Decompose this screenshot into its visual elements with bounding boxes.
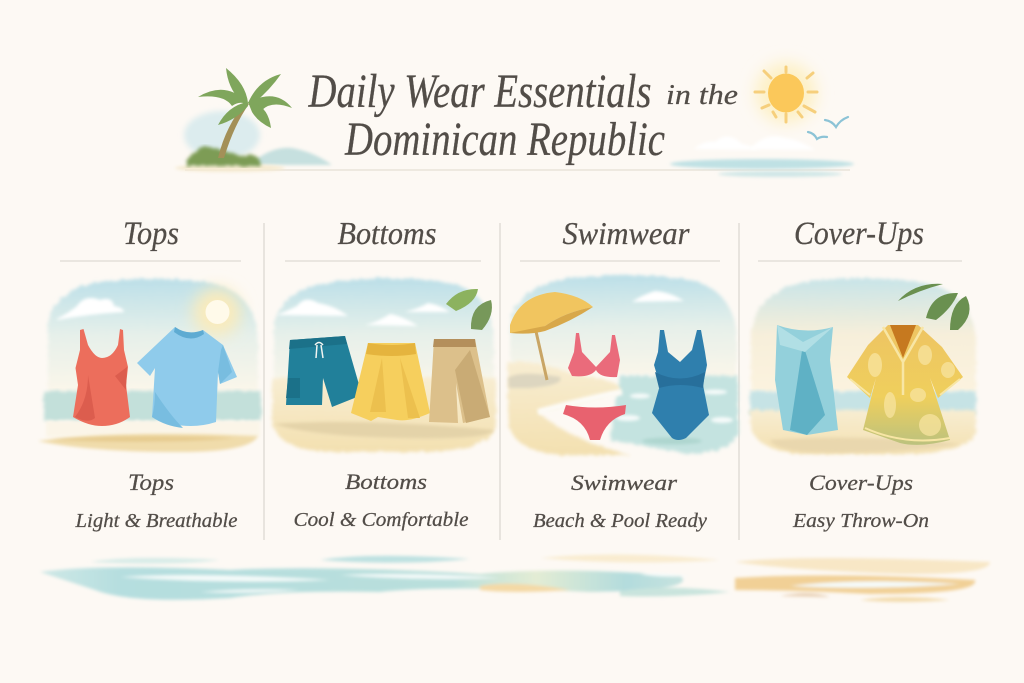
garment: yellow skirt <box>351 343 430 421</box>
panel: bottoms <box>272 215 496 531</box>
heading: cover-ups: Cover-Ups <box>794 216 924 252</box>
banner baseline <box>185 169 850 171</box>
scene: beach <box>750 278 976 454</box>
title banner <box>175 63 854 177</box>
title text: Dominican Republic <box>344 113 665 166</box>
garment: sarong <box>775 325 838 435</box>
icon: sun <box>755 63 817 123</box>
label: swimwear: Swimwear <box>571 470 677 495</box>
garment: khaki trousers <box>429 339 490 423</box>
label: cover-ups: Cover-Ups <box>809 470 913 495</box>
scene: beach <box>508 275 738 455</box>
icon: beach umbrella <box>510 292 593 380</box>
title text <box>308 65 738 166</box>
title text: Daily Wear Essentials <box>308 65 652 118</box>
garment: bikini top <box>568 333 620 377</box>
garment: t-shirt <box>137 327 237 428</box>
garment: one-piece swimsuit <box>652 330 709 440</box>
garment: tank top <box>73 329 130 426</box>
decorative band: watercolor shoreline <box>40 554 990 602</box>
scene: beach <box>272 278 496 452</box>
illustration: clouds and sea <box>670 136 854 177</box>
caption: light and breathable: Light & Breathable <box>74 510 238 532</box>
caption: easy throw-on: Easy Throw-On <box>792 510 929 532</box>
caption: cool and comfortable: Cool & Comfortable <box>294 509 469 531</box>
panel: tops <box>38 216 261 532</box>
panel: swimwear <box>508 215 738 532</box>
scene: beach <box>38 279 261 452</box>
label: bottoms: Bottoms <box>345 469 427 494</box>
heading: swimwear: Swimwear <box>562 215 690 251</box>
garment: kaftan <box>847 325 963 445</box>
label: tops: Tops <box>128 470 174 495</box>
heading: tops: Tops <box>123 216 179 252</box>
heading: bottoms: Bottoms <box>338 215 436 251</box>
caption: beach and pool ready: Beach & Pool Ready <box>533 510 707 532</box>
illustration: palm tree and island <box>175 68 332 172</box>
garment: swim shorts <box>286 336 362 407</box>
garment: bikini bottom <box>563 405 626 440</box>
column dividers <box>264 223 739 540</box>
title text: in the <box>666 79 738 111</box>
panel: cover-ups <box>750 216 976 532</box>
icon: birds <box>808 117 848 139</box>
